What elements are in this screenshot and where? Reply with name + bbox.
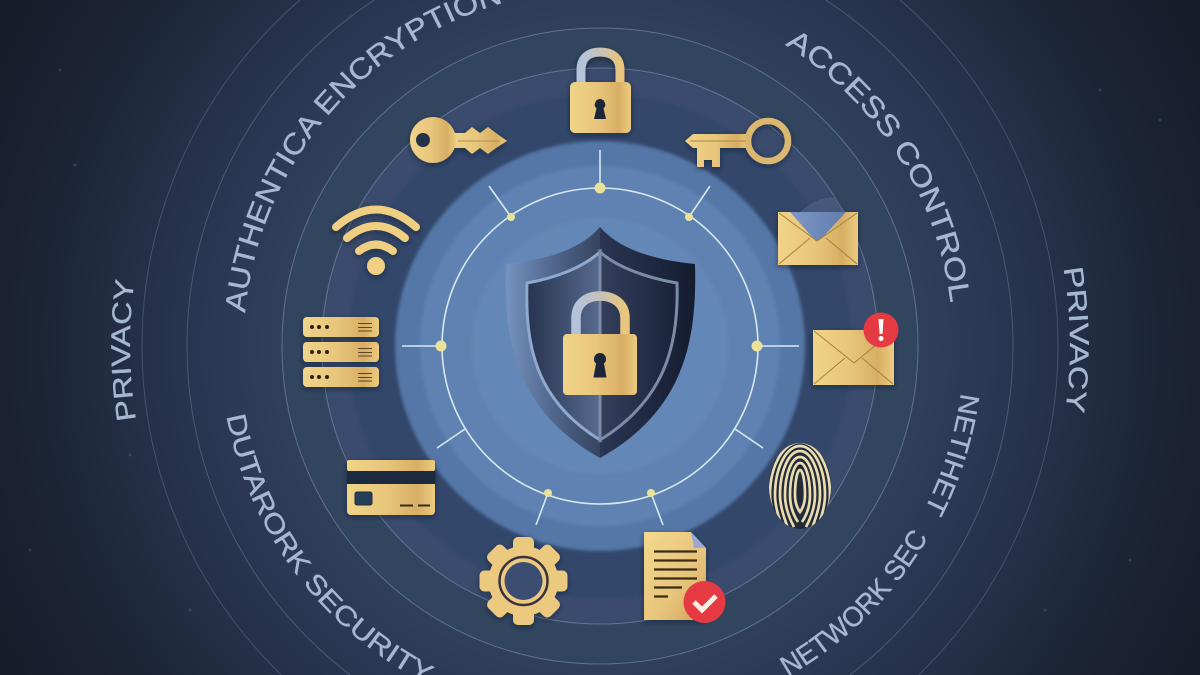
node ring with spokes — [402, 150, 799, 525]
label: Access Control: ACCESS CONTROL — [784, 33, 969, 302]
label: Netihet: NETIHET — [927, 395, 980, 518]
icon: fingerprint — [769, 442, 831, 529]
icon: wifi — [336, 210, 416, 275]
central shield with padlock — [506, 227, 695, 458]
icon: gear — [480, 537, 568, 625]
icon: envelope with alert badge — [813, 312, 898, 385]
concentric background rings — [142, 0, 1058, 675]
icon: credit card — [347, 460, 435, 515]
label: Privacy right: PRIVACY — [1064, 268, 1089, 414]
icon: top padlock — [570, 52, 631, 133]
icon: open envelope — [778, 197, 858, 265]
icon: document with check badge — [644, 532, 726, 623]
icon: central padlock — [563, 296, 637, 395]
label: Privacy left: PRIVACY — [111, 278, 136, 420]
icon: server stack — [303, 317, 379, 387]
icon: key right — [685, 121, 788, 167]
icon: key left — [410, 117, 507, 163]
